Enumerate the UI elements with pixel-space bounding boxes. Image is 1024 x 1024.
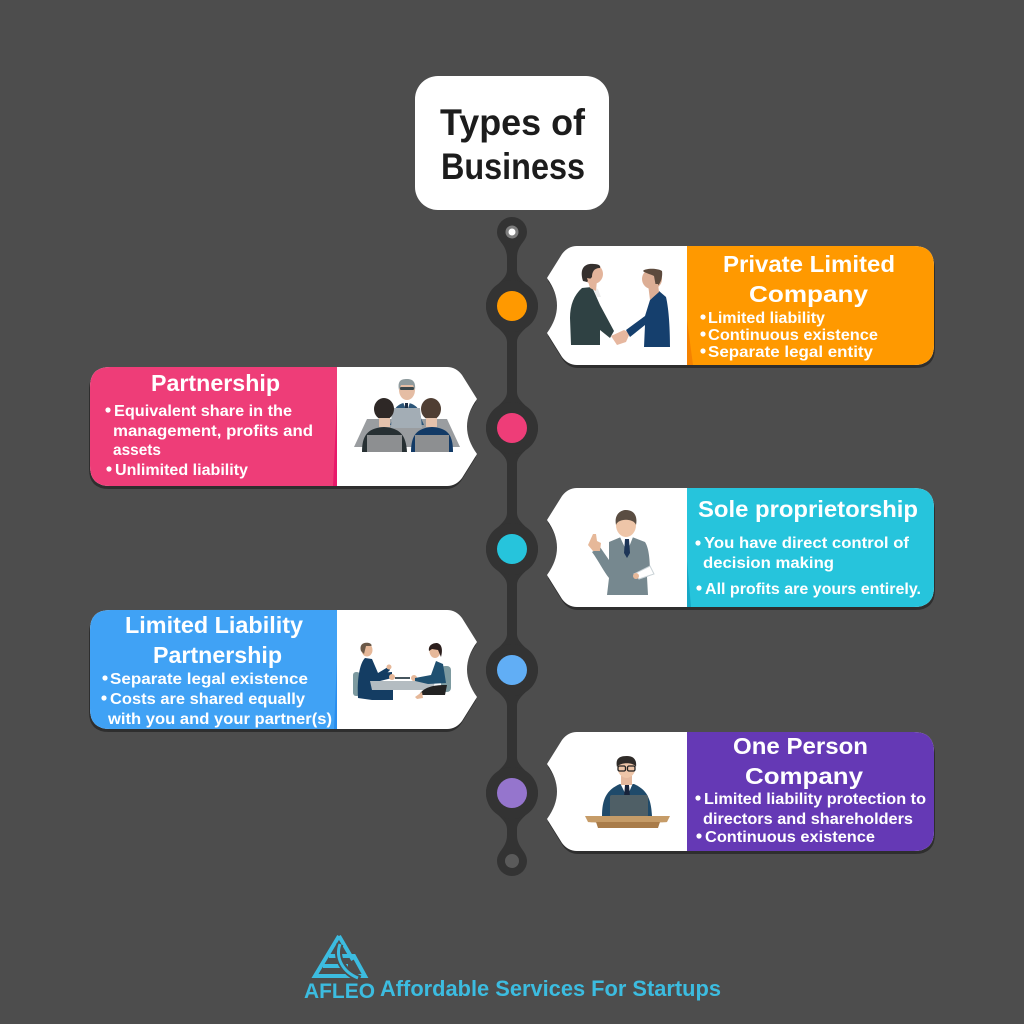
panel: limited liability partnership: Partnership bbox=[153, 642, 282, 668]
panel: sole proprietorship: Sole proprietorship bbox=[698, 496, 918, 522]
panel: partnership bbox=[89, 367, 477, 489]
panel: partnership: management, profits and bbox=[113, 423, 313, 440]
panel: limited liability partnership: Costs are shared equally bbox=[110, 691, 305, 708]
node: partnership bbox=[497, 413, 527, 443]
panel: private limited company: Limited liability bbox=[708, 310, 825, 327]
panel: limited liability partnership bbox=[89, 610, 477, 732]
icon: presenter bbox=[588, 510, 654, 595]
logo: AFLEO: AFLEO bbox=[304, 980, 375, 1003]
node: private limited company bbox=[497, 291, 527, 321]
panel: partnership: assets bbox=[113, 442, 161, 459]
panel: partnership: Partnership bbox=[151, 370, 280, 396]
panel: sole proprietorship: You have direct control of bbox=[704, 535, 910, 552]
logo: AFLEO bbox=[304, 936, 375, 1003]
panel: limited liability partnership: Separate legal existence bbox=[110, 671, 308, 688]
panel: one person company: One Person bbox=[733, 733, 868, 759]
node: limited liability partnership bbox=[497, 655, 527, 685]
panel: private limited company: Continuous existence bbox=[708, 327, 878, 344]
panel: private limited company: Private Limited bbox=[723, 251, 895, 277]
icon: person at desk bbox=[585, 756, 670, 828]
node: sole proprietorship bbox=[497, 534, 527, 564]
icon: two people at a table bbox=[353, 643, 451, 700]
panel: partnership: Unlimited liability bbox=[115, 462, 248, 479]
panel: one person company: Limited liability protection to bbox=[704, 791, 926, 808]
footer tagline: Affordable Services For Startups bbox=[380, 976, 721, 1001]
panel: sole proprietorship: decision making bbox=[703, 555, 834, 572]
node: one person company bbox=[497, 778, 527, 808]
panel: private limited company: Company bbox=[749, 281, 868, 307]
panel: limited liability partnership: with you and your partner(s) bbox=[107, 711, 332, 728]
panel: one person company: directors and shareholders bbox=[703, 811, 913, 828]
title box: Business bbox=[441, 146, 585, 187]
panel: sole proprietorship bbox=[547, 488, 935, 610]
icon: handshake bbox=[570, 264, 670, 347]
icon: meeting bbox=[354, 379, 460, 452]
panel: sole proprietorship: All profits are yours entirely. bbox=[705, 581, 921, 598]
panel: one person company: Company bbox=[745, 763, 863, 789]
panel: private limited company bbox=[547, 246, 935, 368]
panel: one person company: Continuous existence bbox=[705, 829, 875, 846]
panel: private limited company: Separate legal entity bbox=[708, 344, 873, 361]
panel: one person company bbox=[547, 732, 935, 854]
title box: Types of bbox=[440, 102, 586, 143]
panel: limited liability partnership: Limited Liability bbox=[125, 612, 303, 638]
panel: partnership: Equivalent share in the bbox=[114, 403, 292, 420]
timeline bbox=[486, 217, 538, 876]
title box bbox=[415, 76, 609, 210]
